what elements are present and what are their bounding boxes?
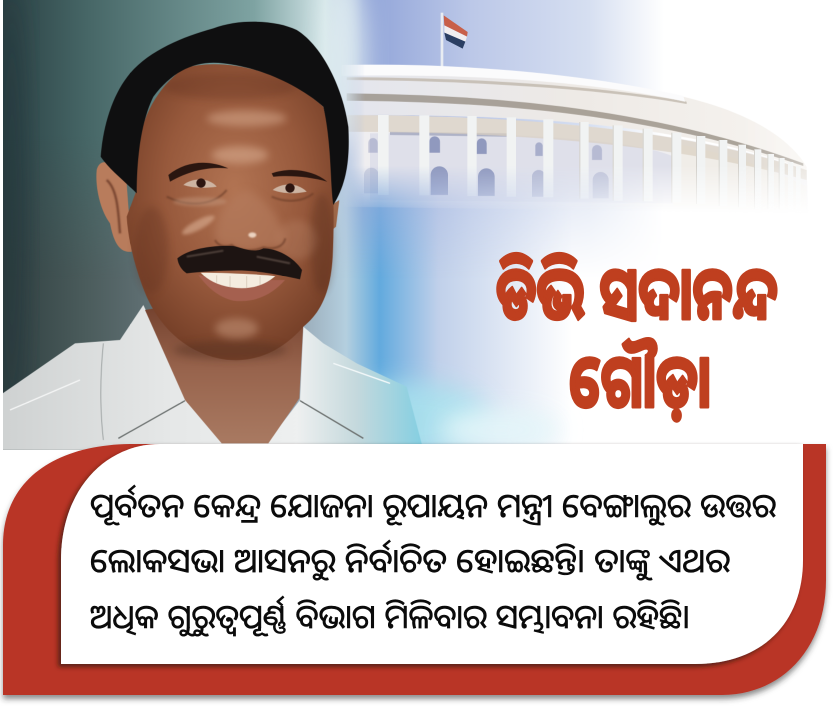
icon: flag <box>441 13 468 76</box>
lips and teeth <box>198 275 285 301</box>
background gradient <box>3 0 650 450</box>
title line 2: ଗୌଡ଼ା <box>569 338 711 423</box>
highlights <box>180 110 317 338</box>
left ear <box>96 162 132 252</box>
mustache <box>177 246 302 279</box>
parliament building <box>340 13 808 213</box>
right ear <box>333 200 340 229</box>
panel: white text card <box>61 444 803 664</box>
line 1: ପୂର୍ବତନ କେନ୍ଦ୍ର ଯୋଜନା ରୂପାୟନ ମନ୍ତ୍ରୀ ବେଙ୍ଗାଲୁର ଉତ୍ତର <box>90 484 776 526</box>
neck <box>145 297 303 443</box>
face <box>127 64 334 360</box>
nose <box>216 196 282 249</box>
line 2: ଲୋକସଭା ଆସନରୁ ନିର୍ବାଚିତ ହୋଇଛନ୍ତି। ତାଙ୍କୁ ଏଥର <box>90 539 730 581</box>
column shading <box>579 122 780 209</box>
cheek shading <box>135 207 168 293</box>
collar lines <box>10 343 390 440</box>
title <box>496 252 778 423</box>
windows <box>364 136 609 198</box>
eyebrows <box>168 163 228 182</box>
body text <box>90 484 776 637</box>
building body <box>340 65 808 213</box>
eyes <box>167 178 313 206</box>
portrait of man <box>3 22 423 450</box>
columns <box>378 115 800 197</box>
line 3: ଅଧିକ ଗୁରୁତ୍ୱପୂର୍ଣ୍ଣ ବିଭାଗ ମିଳିବାର ସମ୍ଭାବନା ରହିଛି। <box>90 595 690 637</box>
hair <box>101 22 349 205</box>
shirt <box>3 305 423 450</box>
panel: red backing <box>3 444 826 695</box>
